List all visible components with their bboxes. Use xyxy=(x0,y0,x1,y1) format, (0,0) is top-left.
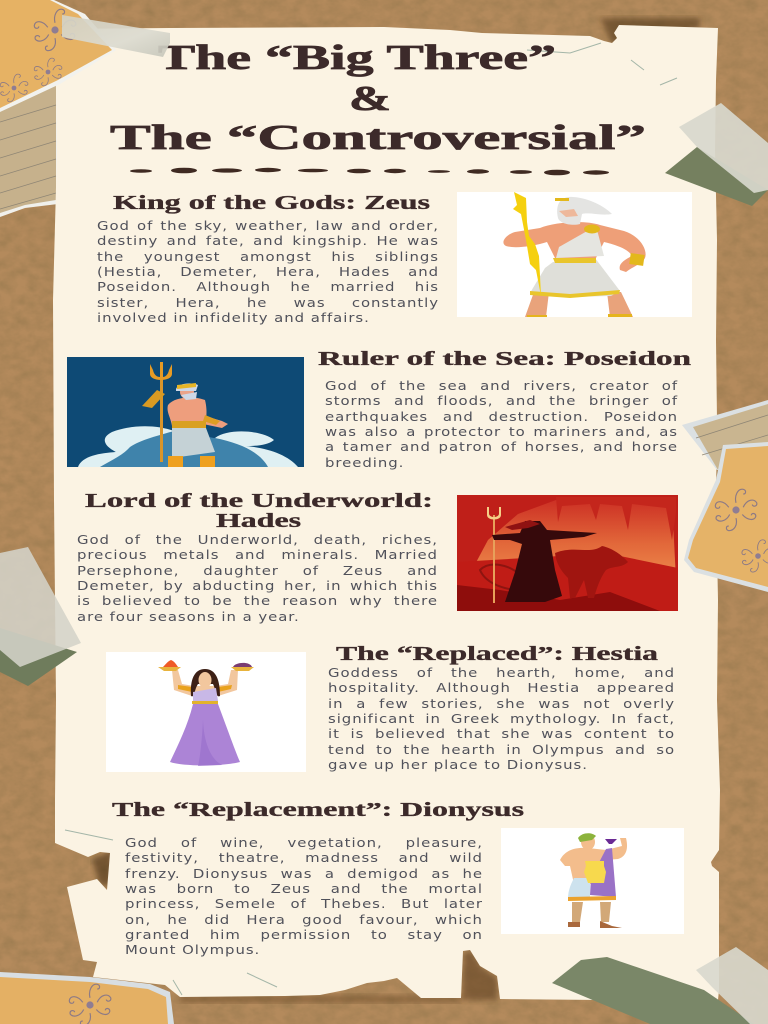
brush dash divider xyxy=(130,168,609,176)
panel: Poseidon xyxy=(67,349,691,470)
text: Dionysus description: frenzy. Dionysus was a demigod as he xyxy=(125,866,483,881)
illustration: Hades with staff and Cerberus xyxy=(457,495,678,611)
text: Dionysus description: princess, Semele of Thebes. But later xyxy=(125,896,483,911)
text: Dionysus description: was born to Zeus and the mortal xyxy=(125,881,483,896)
text: Zeus description: God of the sky, weather, law and order, xyxy=(97,218,439,233)
scrap: orange patterned paper bottom left xyxy=(0,972,174,1024)
text: Poseidon description: was also a protector to mariners and, as xyxy=(325,424,678,439)
text: Hestia description: tend to the hearth in Olympus and so xyxy=(328,742,675,757)
text: Hestia description: Goddess of the hearth, home, and xyxy=(328,665,675,680)
title: The “Big Three” xyxy=(158,38,556,77)
text: Hades description: Demeter, by abducting her, in which this xyxy=(77,578,438,593)
text: Hestia description: hospitality. Although Hestia appeared xyxy=(328,680,675,695)
illustration: Dionysus with jug and grapes xyxy=(501,828,684,934)
heading: Hades: Hades xyxy=(216,511,302,532)
tape: top right xyxy=(665,103,768,206)
title xyxy=(110,38,646,157)
text: Zeus description: (Hestia, Demeter, Hera, Hades and xyxy=(97,264,439,279)
text: Hades description: God of the Underworld, death, riches, xyxy=(77,532,438,547)
text: Dionysus description: granted him permission to stay on xyxy=(125,927,483,942)
scrap: orange patterned paper top left xyxy=(0,0,116,112)
panel: Dionysus xyxy=(112,800,684,957)
text: Hades description xyxy=(77,532,438,624)
text: Zeus description: sister, Hera, he was constantly xyxy=(97,295,439,310)
tape: bottom right xyxy=(552,947,768,1024)
text: Poseidon description: breeding. xyxy=(325,455,404,470)
title: & xyxy=(349,79,391,118)
text: Hestia description: gave up her place to Dionysus. xyxy=(328,757,588,772)
text: Zeus description: Poseidon. Although he married his xyxy=(97,279,439,294)
text: Dionysus description xyxy=(125,835,483,957)
text: Poseidon description: a tamer and patron of horses, and horse xyxy=(325,439,678,454)
text: Poseidon description: earthquakes and destruction. Poseidon xyxy=(325,409,678,424)
text: Dionysus description: Mount Olympus. xyxy=(125,942,260,957)
text: Hestia description: significant in Greek mythology. In fact, xyxy=(328,711,675,726)
text: Zeus description: destiny and fate, and kingship. He was xyxy=(97,233,439,248)
heading: Poseidon: Ruler of the Sea: Poseidon xyxy=(318,349,691,370)
text: Hades description: are four seasons in a year. xyxy=(77,609,300,624)
text: Hades description: Persephone, daughter of Zeus and xyxy=(77,563,438,578)
text: Poseidon description: storms and floods, and the bringer of xyxy=(325,393,678,408)
text: Hades description: is believed to be the reason why there xyxy=(77,593,438,608)
illustration: Poseidon with trident and waves xyxy=(67,357,304,467)
tape: top left xyxy=(62,15,170,57)
text: Dionysus description: on, he did Hera good favour, which xyxy=(125,912,483,927)
text: Zeus description xyxy=(97,218,439,325)
text: Hades description: precious metals and minerals. Married xyxy=(77,547,438,562)
scrap: torn papers on right edge xyxy=(682,400,768,592)
text: Hestia description: it is believed that she was content to xyxy=(328,726,675,741)
text: Zeus description: the youngest amongst his siblings xyxy=(97,249,439,264)
text: Poseidon description: God of the sea and rivers, creator of xyxy=(325,378,678,393)
illustration: Zeus with lightning bolt xyxy=(457,192,692,317)
tape: middle left xyxy=(0,547,81,686)
text: Zeus description: involved in infidelity and affairs. xyxy=(97,310,370,325)
heading: Hestia: The “Replaced”: Hestia xyxy=(336,644,658,665)
panel: Hestia xyxy=(106,644,675,772)
panel: Hades xyxy=(77,491,678,624)
text: Hestia description xyxy=(328,665,675,772)
panel: Zeus xyxy=(97,192,692,325)
title: The “Controversial” xyxy=(110,118,646,157)
heading: Hades: Lord of the Underworld: xyxy=(85,491,433,512)
illustration: Hestia holding two trays xyxy=(106,652,306,772)
text: Poseidon description xyxy=(325,378,678,470)
text: Dionysus description: festivity, theatre, madness and wild xyxy=(125,850,483,865)
text: Dionysus description: God of wine, vegetation, pleasure, xyxy=(125,835,483,850)
text: Hestia description: in a few stories, she was not overly xyxy=(328,696,675,711)
heading: Dionysus: The “Replacement”: Dionysus xyxy=(112,800,525,821)
scrap: lined paper top left xyxy=(0,86,57,217)
heading: Zeus: King of the Gods: Zeus xyxy=(113,193,431,214)
heading: Hades xyxy=(85,491,433,532)
